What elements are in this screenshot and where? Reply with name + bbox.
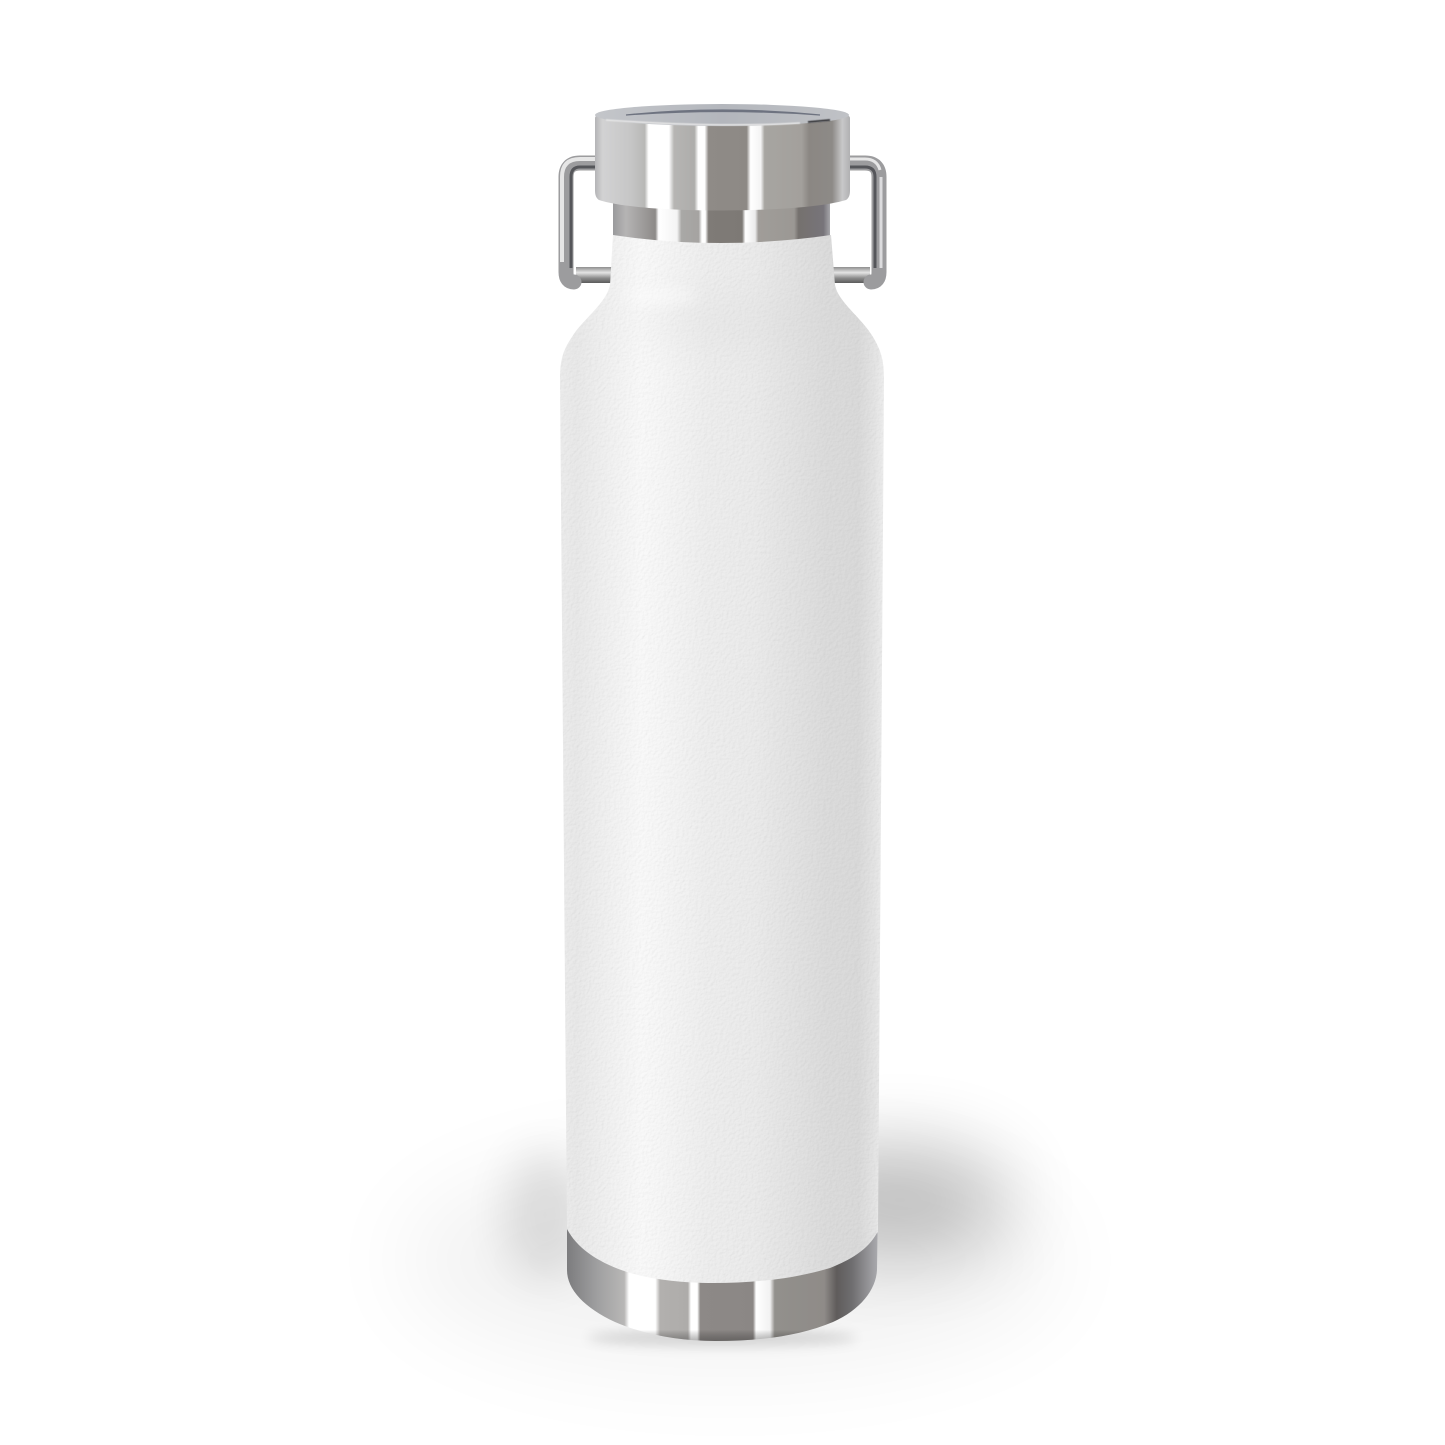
ground shadow	[400, 1145, 1060, 1370]
left handle	[562, 159, 614, 283]
textured powder coat	[550, 225, 895, 1295]
product illustration: insulated bottle	[447, 104, 1046, 1357]
cap top face	[595, 104, 849, 126]
steel base	[567, 1229, 878, 1341]
neck highlight	[624, 287, 696, 305]
right handle	[832, 159, 881, 283]
shoulder shading	[630, 306, 850, 338]
bottle body	[550, 225, 895, 1295]
cap top inset	[626, 110, 820, 115]
steel cap	[595, 100, 850, 215]
cap rim highlight	[606, 120, 800, 125]
steel neck ring	[613, 200, 830, 244]
